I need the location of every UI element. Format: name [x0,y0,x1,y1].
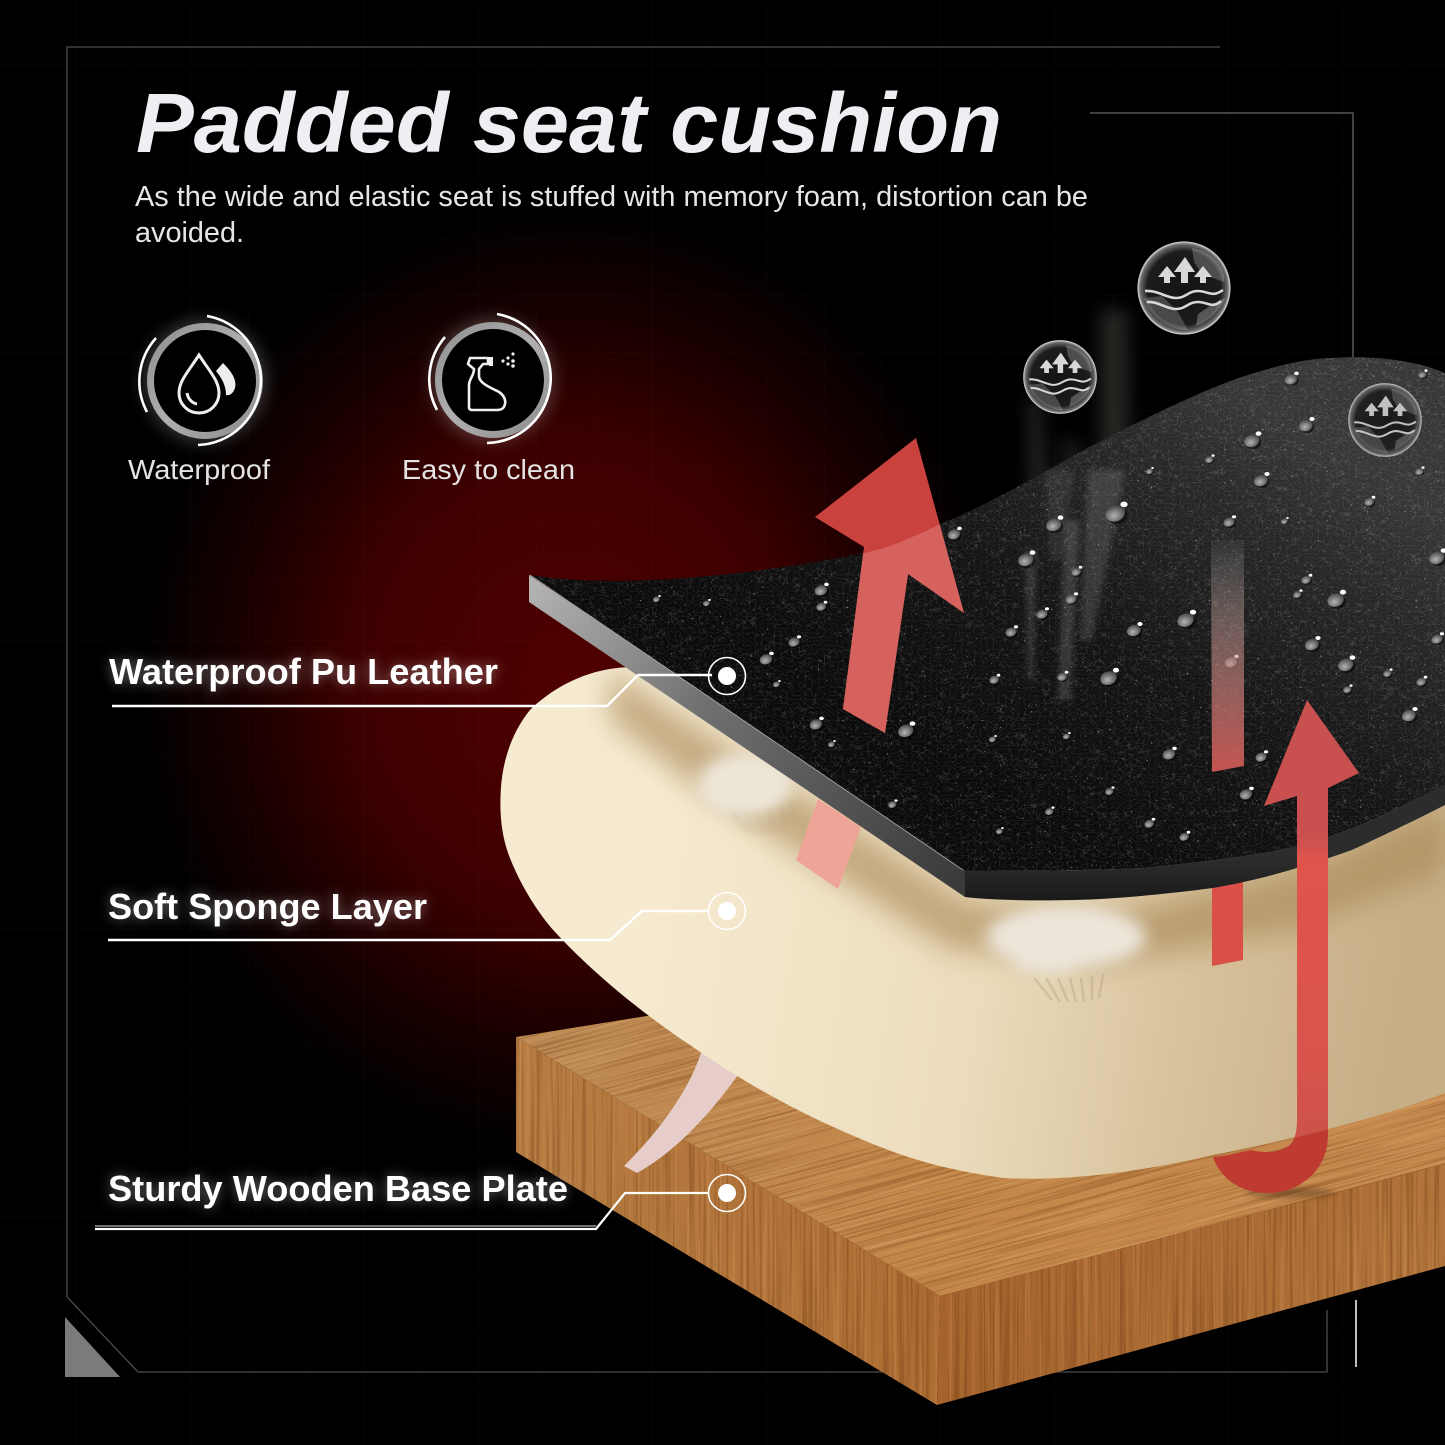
waterproof pu leather [529,357,1445,900]
bubble: right [1349,384,1421,456]
callout: soft sponge layer: Soft Sponge Layer [108,886,427,927]
label: easy to clean: Easy to clean [402,454,575,485]
corner triangle [65,1317,120,1377]
water droplets [652,369,1445,842]
icon: waterproof [139,316,267,445]
steam puff left [697,753,793,817]
callout: sturdy wooden base plate [95,1168,746,1229]
wooden base plate [516,1016,1445,1405]
steam bristles left [732,800,792,836]
label: waterproof: Waterproof [128,454,270,485]
lower arrow pieces beneath leather [796,799,1243,966]
description text: As the wide and elastic seat is stuffed with memory foam, distortion can be [135,181,1088,213]
red arrow: left [815,438,964,733]
description text [135,181,1088,249]
steam puff right [986,905,1146,975]
callout: soft sponge layer [108,886,746,940]
title: Padded seat cushion [136,76,1002,170]
icon: easy to clean [429,314,555,443]
bubble: top [1138,242,1230,334]
callout: sturdy wooden base plate: Sturdy Wooden Base Plate [108,1168,568,1209]
steam bristles right [1034,974,1103,1002]
description text: avoided. [135,217,244,249]
faint red strip on leather [1211,540,1244,772]
red arrow: bottom of U-turn on wood [1213,700,1359,1198]
arrow tail behind foam [624,1047,743,1173]
callout: waterproof pu leather [109,651,746,706]
red arrow: right U-turn [1264,700,1359,1138]
steam over leather [1025,470,1125,700]
bubble: left [1024,341,1096,413]
steam above leather [1028,310,1130,540]
callout: waterproof pu leather: Waterproof Pu Leather [109,651,498,692]
soft sponge layer [500,667,1445,1179]
